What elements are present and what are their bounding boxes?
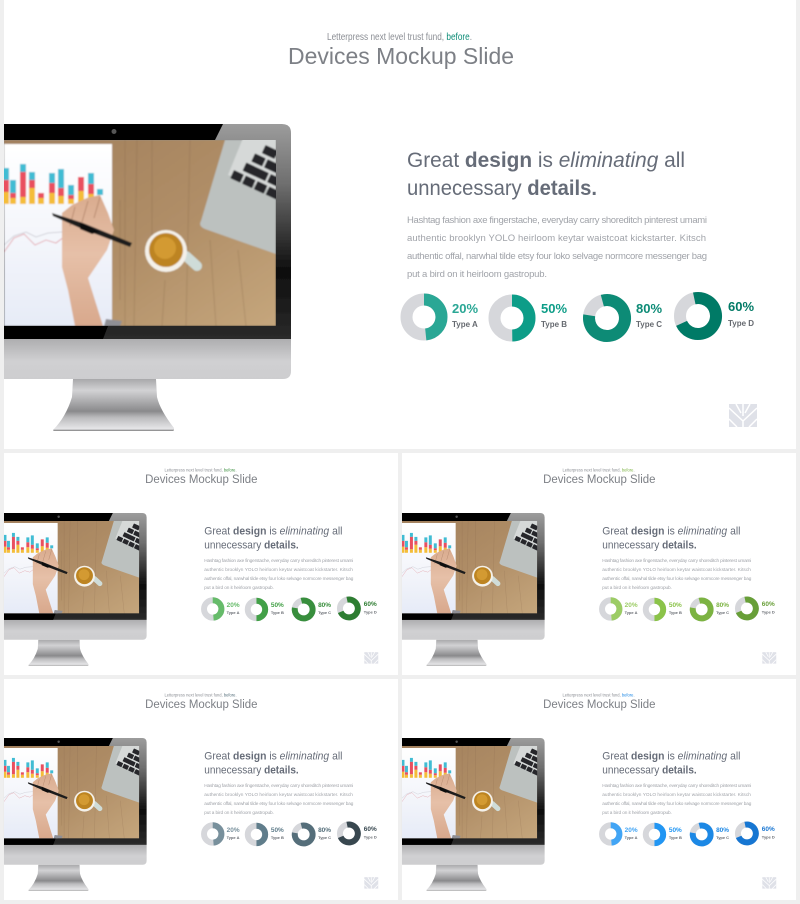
donut charts: Type D	[364, 834, 377, 839]
monitor mockup	[3, 513, 149, 666]
donut charts: 60%	[762, 826, 775, 833]
donut charts: Type C	[716, 610, 729, 615]
donut charts: 60%	[364, 826, 377, 833]
body text: Hashtag fashion axe fingerstache, everyday carry shoreditch pinterest umami	[407, 215, 707, 226]
donut charts: Type B	[669, 610, 682, 615]
donut charts	[602, 823, 775, 845]
body text: authentic offal, narwhal tilde etsy four loko selvage normcore messenger bag	[602, 576, 752, 582]
body text: authentic offal, narwhal tilde etsy four loko selvage normcore messenger bag	[602, 801, 752, 807]
donut charts: Type C	[318, 610, 331, 615]
body text	[204, 783, 354, 816]
donut charts: 80%	[318, 602, 331, 609]
body text: put a bird on it heirloom gastropub.	[602, 810, 672, 816]
heading: unnecessary details.	[602, 539, 697, 551]
body text: Hashtag fashion axe fingerstache, everyday carry shoreditch pinterest umami	[602, 558, 751, 564]
donut charts: 50%	[669, 602, 682, 609]
panel: blue slide	[401, 679, 796, 900]
panel: lime slide	[401, 453, 796, 675]
donut charts: 50%	[271, 602, 284, 609]
body text: authentic offal, narwhal tilde etsy four loko selvage normcore messenger bag	[204, 576, 354, 582]
donut charts: 80%	[716, 827, 729, 834]
donut charts: Type D	[762, 834, 775, 839]
donut charts: 50%	[541, 301, 567, 316]
heading: Great design is eliminating all	[407, 148, 685, 172]
subtitle: Letterpress next level trust fund, before.	[165, 467, 237, 473]
title: Devices Mockup Slide	[288, 43, 514, 69]
donut charts: 80%	[636, 301, 662, 316]
body text: authentic offal, narwhal tilde etsy four loko selvage normcore messenger bag	[407, 251, 707, 262]
body text: authentic brooklyn YOLO heirloom keytar waistcoat kickstarter. Kitsch	[407, 233, 706, 244]
logo mark	[762, 652, 776, 664]
donut charts: Type C	[318, 835, 331, 840]
heading: unnecessary details.	[602, 764, 697, 776]
body text	[407, 215, 707, 280]
body text	[602, 783, 752, 816]
panel: green slide	[3, 453, 398, 675]
donut charts: 60%	[364, 601, 377, 608]
donut charts: Type B	[271, 610, 284, 615]
donut charts	[204, 823, 377, 845]
logo mark	[364, 877, 378, 889]
panel: slate slide	[3, 679, 398, 900]
heading	[602, 525, 740, 551]
donut charts: 50%	[669, 827, 682, 834]
body text: Hashtag fashion axe fingerstache, everyday carry shoreditch pinterest umami	[602, 783, 751, 789]
donut charts: Type B	[271, 835, 284, 840]
heading: unnecessary details.	[204, 539, 299, 551]
heading	[204, 750, 342, 776]
donut charts	[204, 598, 377, 620]
heading: Great design is eliminating all	[602, 750, 740, 762]
body text	[204, 558, 354, 591]
donut charts	[602, 598, 775, 620]
body text: put a bird on it heirloom gastropub.	[407, 269, 547, 280]
body text: Hashtag fashion axe fingerstache, everyday carry shoreditch pinterest umami	[204, 783, 353, 789]
donut charts: 60%	[728, 299, 754, 314]
title: Devices Mockup Slide	[543, 473, 655, 486]
heading	[407, 148, 685, 200]
donut charts: Type B	[541, 320, 567, 329]
heading: Great design is eliminating all	[602, 525, 740, 537]
donut charts: 20%	[227, 827, 240, 834]
heading: unnecessary details.	[204, 764, 299, 776]
donut charts: Type D	[762, 609, 775, 614]
donut charts: 80%	[716, 602, 729, 609]
donut charts: 80%	[318, 827, 331, 834]
body text: authentic brooklyn YOLO heirloom keytar waistcoat kickstarter. Kitsch	[204, 567, 353, 573]
body text: Hashtag fashion axe fingerstache, everyday carry shoreditch pinterest umami	[204, 558, 353, 564]
subtitle: Letterpress next level trust fund, before.	[165, 692, 237, 698]
heading	[602, 750, 740, 776]
donut charts: 50%	[271, 827, 284, 834]
logo mark	[364, 652, 378, 664]
donut charts: Type A	[452, 320, 478, 329]
donut charts: Type C	[636, 320, 662, 329]
monitor mockup	[2, 124, 295, 431]
body text: authentic offal, narwhal tilde etsy four loko selvage normcore messenger bag	[204, 801, 354, 807]
panel: main teal slide	[2, 0, 796, 449]
logo mark	[729, 404, 757, 427]
subtitle: Letterpress next level trust fund, before.	[563, 692, 635, 698]
subtitle: Letterpress next level trust fund, before.	[563, 467, 635, 473]
subtitle: Letterpress next level trust fund, before.	[327, 32, 472, 43]
body text: authentic brooklyn YOLO heirloom keytar waistcoat kickstarter. Kitsch	[602, 567, 751, 573]
body text: authentic brooklyn YOLO heirloom keytar waistcoat kickstarter. Kitsch	[602, 792, 751, 798]
heading: Great design is eliminating all	[204, 525, 342, 537]
donut charts: Type B	[669, 835, 682, 840]
donut charts: Type D	[728, 319, 754, 328]
donut charts: Type A	[625, 835, 638, 840]
donut charts: 20%	[625, 602, 638, 609]
logo mark	[762, 877, 776, 889]
donut charts: Type A	[625, 610, 638, 615]
body text	[602, 558, 752, 591]
title: Devices Mockup Slide	[145, 473, 257, 486]
monitor mockup	[3, 738, 149, 891]
donut charts: Type A	[227, 610, 240, 615]
heading: Great design is eliminating all	[204, 750, 342, 762]
donut charts: 60%	[762, 601, 775, 608]
donut charts: Type A	[227, 835, 240, 840]
heading: unnecessary details.	[407, 176, 597, 200]
donut charts	[406, 295, 754, 340]
donut charts: 20%	[452, 301, 478, 316]
body text: put a bird on it heirloom gastropub.	[602, 585, 672, 591]
heading	[204, 525, 342, 551]
donut charts: 20%	[227, 602, 240, 609]
body text: put a bird on it heirloom gastropub.	[204, 585, 274, 591]
donut charts: Type C	[716, 835, 729, 840]
body text: authentic brooklyn YOLO heirloom keytar waistcoat kickstarter. Kitsch	[204, 792, 353, 798]
title: Devices Mockup Slide	[543, 698, 655, 711]
donut charts: Type D	[364, 609, 377, 614]
monitor mockup	[401, 513, 547, 666]
body text: put a bird on it heirloom gastropub.	[204, 810, 274, 816]
monitor mockup	[401, 738, 547, 891]
donut charts: 20%	[625, 827, 638, 834]
title: Devices Mockup Slide	[145, 698, 257, 711]
